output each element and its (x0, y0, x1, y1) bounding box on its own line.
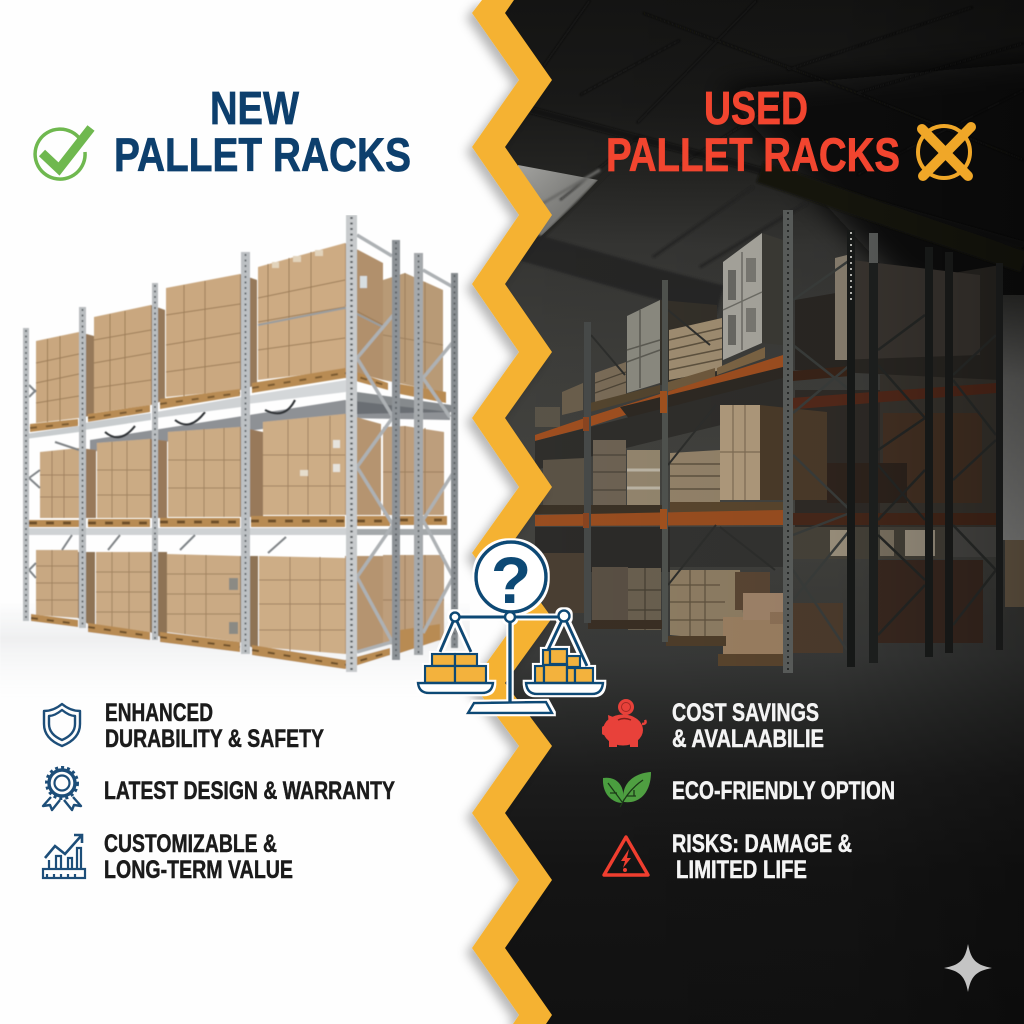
right-side darkening (837, 232, 1024, 776)
floor reflection (0, 600, 470, 710)
text: enhanced durability and safety: DURABILITY & SAFETY (105, 725, 324, 753)
right wall (1003, 295, 1024, 540)
top beams (25, 380, 450, 452)
panel: new racks white background (0, 0, 560, 1024)
title: used pallet racks (606, 82, 900, 181)
base (468, 702, 552, 713)
top shelf pallets of boxes (36, 243, 383, 423)
bottom shelf wooden pallets (31, 614, 440, 669)
yellow zigzag divider (472, 0, 552, 1024)
beam and post (440, 616, 587, 704)
lower beams (25, 528, 346, 535)
text: customizable and long-term value: CUSTOMIZABLE & (104, 830, 277, 858)
icon: orange cross in circle (918, 126, 971, 178)
middle shelf wooden pallets (29, 516, 447, 527)
bottom shelf boxes (535, 527, 783, 666)
top shelf wooden pallets (30, 368, 446, 432)
icon: warning triangle (604, 837, 648, 875)
text: enhanced durability and safety (105, 699, 324, 753)
icon: award rosette (43, 768, 81, 810)
ceiling skylight (518, 165, 598, 240)
title: new pallet racks: PALLET RACKS (114, 128, 411, 181)
icon: piggy bank (602, 699, 646, 747)
question circle: ? (491, 543, 531, 617)
right boxes (535, 649, 593, 683)
braces and rails (29, 235, 453, 652)
text: enhanced durability and safety: ENHANCED (105, 699, 213, 727)
left pan (418, 683, 493, 693)
middle shelf boxes (535, 378, 827, 514)
text: risks damage and limited life: LIMITED LIFE (676, 856, 807, 884)
panel: used racks dark warehouse (480, 0, 1024, 1024)
bottom shelf pallets of boxes (36, 550, 383, 654)
pivots (450, 610, 570, 622)
steel uprights (23, 215, 458, 672)
title: new pallet racks: NEW (210, 82, 299, 134)
ceiling structure (521, 13, 946, 312)
text: cost savings and availability: COST SAVINGS (672, 699, 819, 727)
far frame boxes (357, 273, 451, 645)
title: used pallet racks: PALLET RACKS (606, 128, 900, 181)
text: customizable and long-term value (104, 830, 293, 884)
text: customizable and long-term value: LONG-TERM VALUE (104, 856, 293, 884)
text: latest design and warranty: LATEST DESIGN & WARRANTY (104, 777, 395, 805)
new pallet rack photo illustration (0, 215, 470, 710)
icon: sparkle watermark (944, 944, 992, 992)
left boxes (425, 654, 486, 683)
list: new rack benefits (43, 699, 395, 884)
dark rack uprights and braces (591, 260, 996, 650)
text: risks damage and limited life: RISKS: DAMAGE & (672, 830, 852, 858)
title: new pallet racks (114, 82, 411, 181)
question circle (476, 542, 546, 617)
top shelf boxes (535, 233, 783, 427)
list: used rack points (602, 699, 895, 884)
text: cost savings and availability: & AVALAABILIE (672, 725, 824, 753)
icon: balance scale with question mark (418, 542, 603, 713)
icon: shield (44, 704, 80, 746)
text: risks damage and limited life (672, 830, 852, 884)
icon: green leaves (603, 772, 651, 807)
lower orange beam (535, 510, 783, 526)
text: eco-friendly option: ECO-FRIENDLY OPTION (672, 777, 895, 805)
icon: growth chart on ruler (43, 835, 85, 878)
icon: green check in circle (35, 128, 91, 179)
right pan (526, 683, 603, 694)
upper orange beam (535, 355, 783, 441)
text: cost savings and availability (672, 699, 824, 753)
middle shelf pallets of boxes (40, 414, 381, 518)
back window light (795, 527, 945, 530)
title: used pallet racks: USED (704, 82, 808, 134)
far back boxes (793, 255, 1024, 653)
